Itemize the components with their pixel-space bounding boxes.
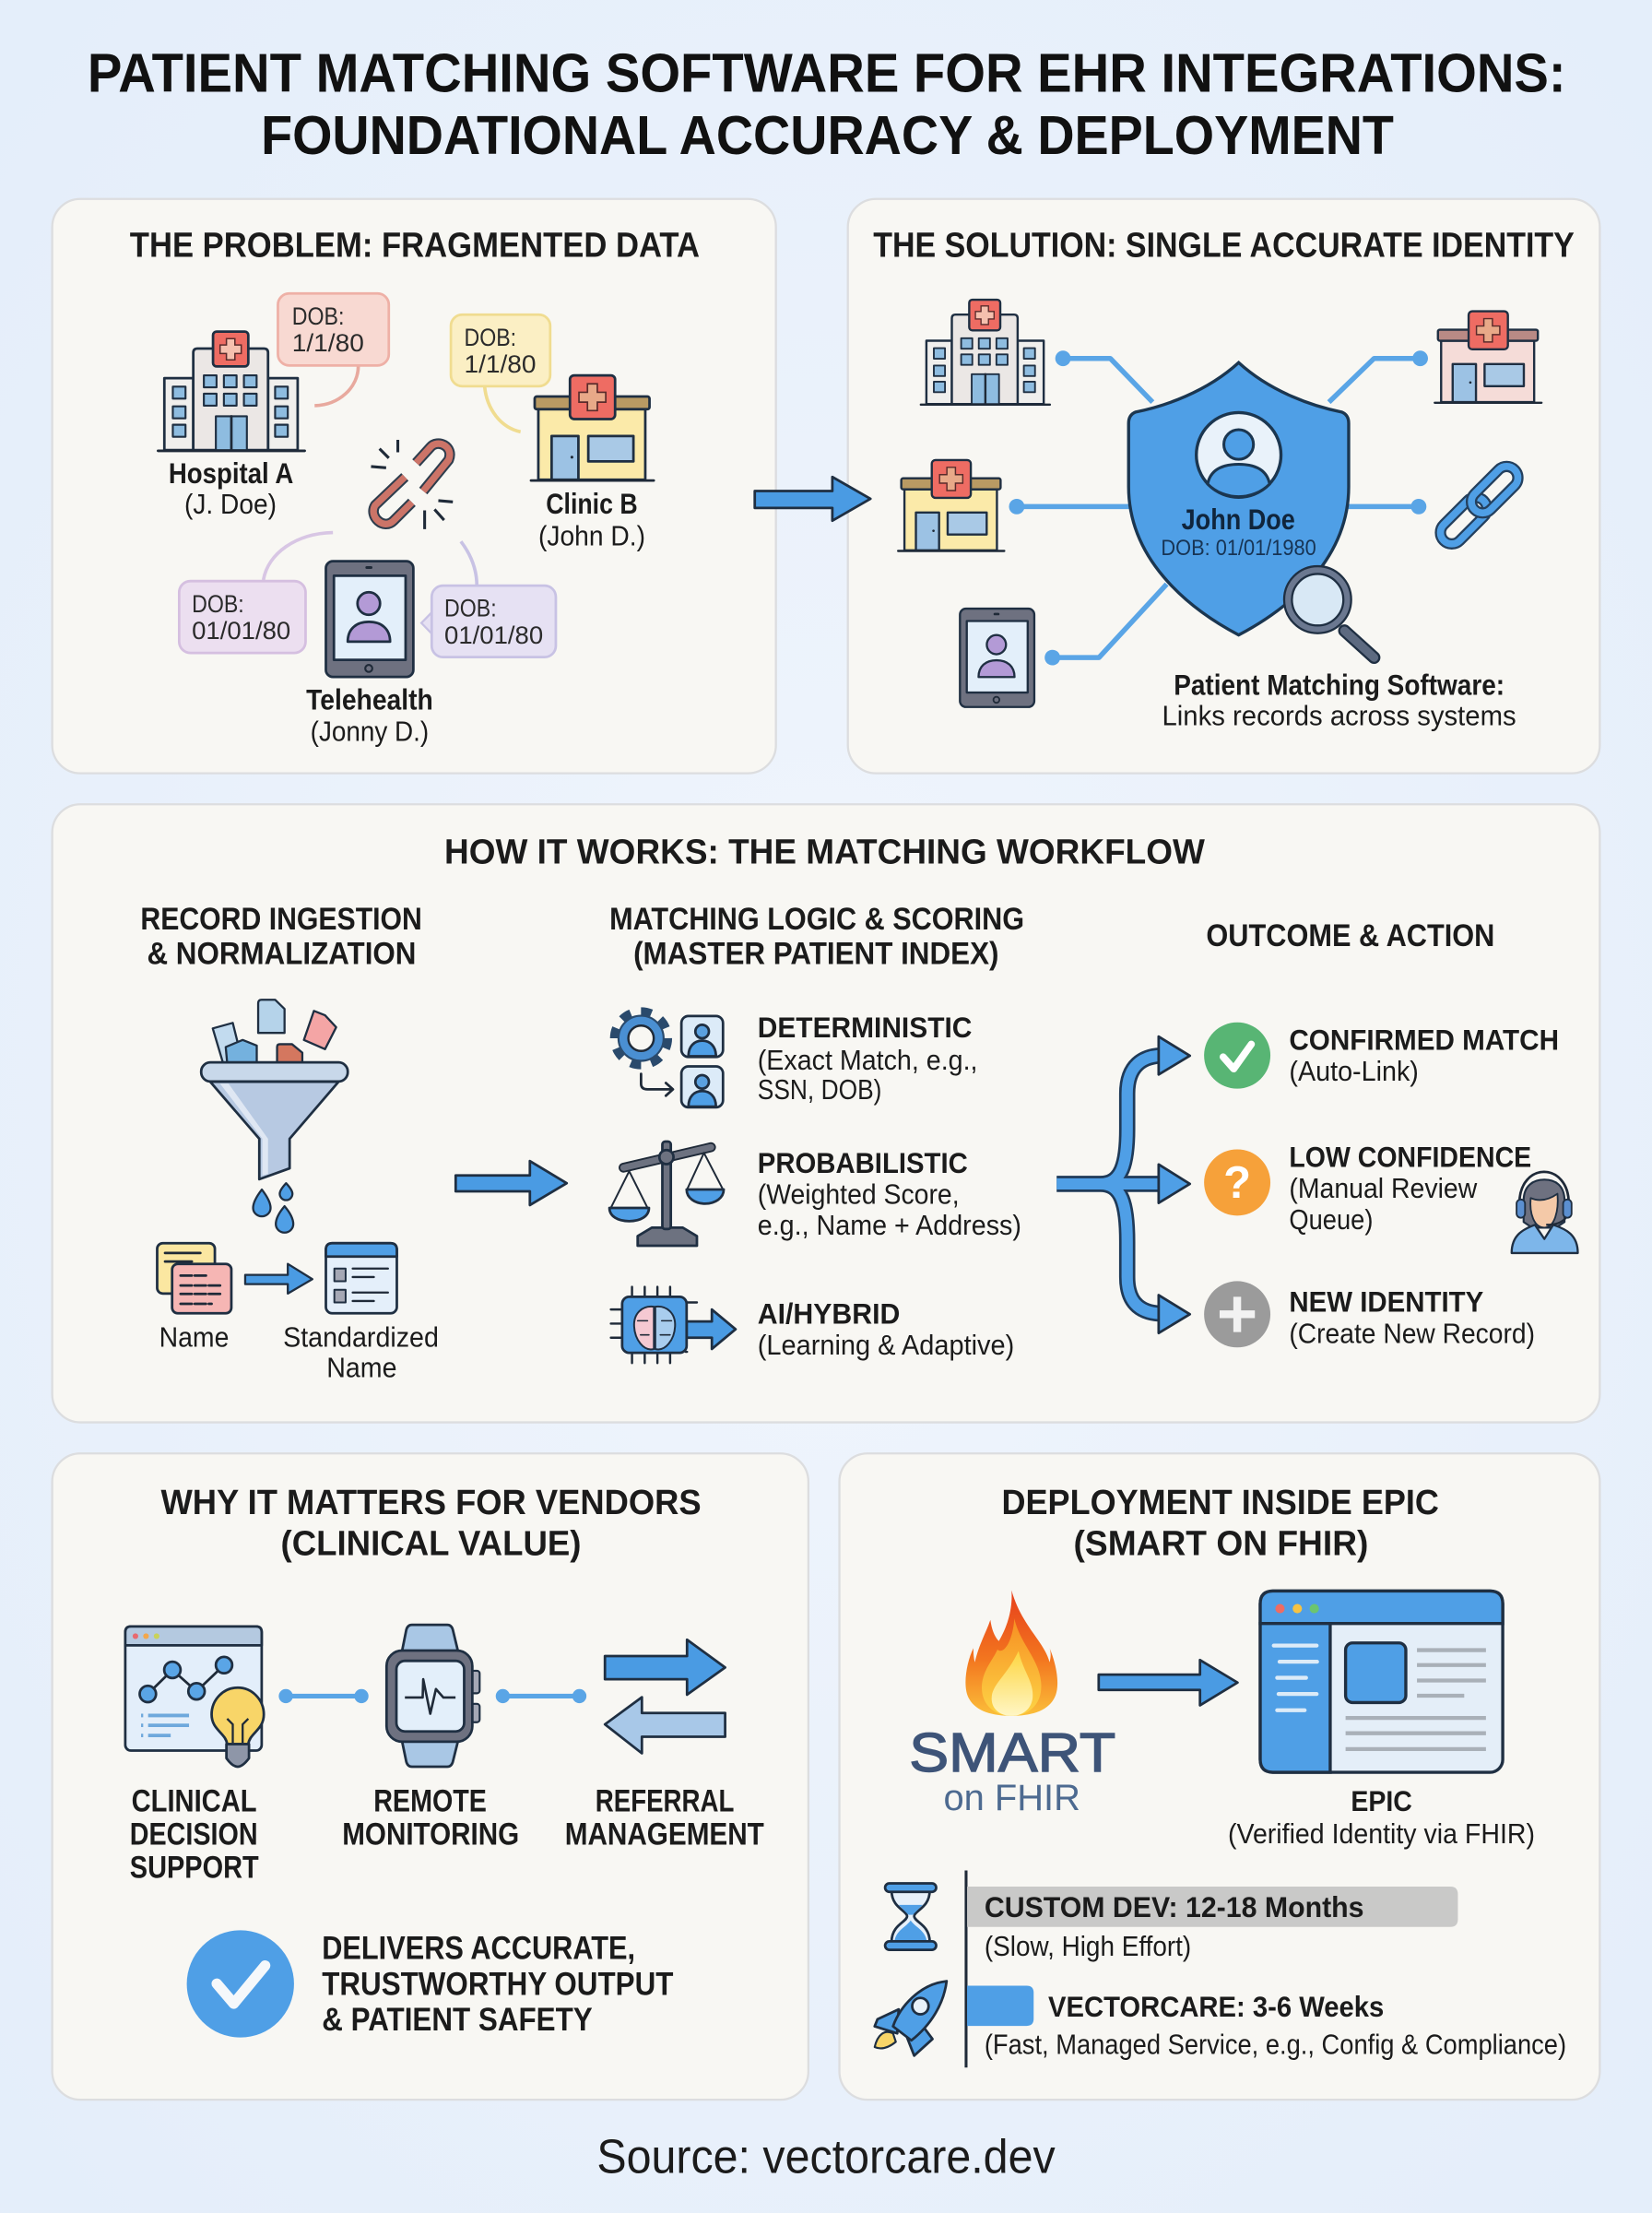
- icon: low confidence question mark: [1204, 1149, 1270, 1215]
- icon: hourglass: [885, 1884, 937, 1950]
- link dots: support to monitoring: [278, 1689, 369, 1703]
- heading: deployment: [1002, 1483, 1439, 1563]
- arrow: branching outcomes: [1056, 1036, 1190, 1333]
- bar: custom dev timeline: [967, 1887, 1457, 1962]
- heading: why it matters: (CLINICAL VALUE): [281, 1523, 581, 1563]
- icon: new identity plus: [1204, 1281, 1270, 1347]
- label: referral management: MANAGEMENT: [565, 1817, 764, 1852]
- heading: deployment: DEPLOYMENT INSIDE EPIC: [1002, 1483, 1439, 1522]
- note: fast managed service: (Fast, Managed Service, e.g., Config & Compliance): [985, 2029, 1566, 2060]
- heading: why it matters: [160, 1483, 702, 1563]
- icon: standardized record window: [326, 1243, 396, 1313]
- panel: why it matters: [53, 1453, 808, 2100]
- label: remote monitoring: MONITORING: [342, 1817, 519, 1852]
- label: referral management: [565, 1784, 764, 1852]
- title: FOUNDATIONAL ACCURACY & DEPLOYMENT: [261, 104, 1394, 166]
- title: [88, 41, 1566, 166]
- text: new identity: [1289, 1285, 1535, 1349]
- text: confirmed match: CONFIRMED MATCH: [1289, 1024, 1559, 1057]
- callout: hospital DOB: 1/1/80: [292, 329, 364, 357]
- text: delivers accurate output: TRUSTWORTHY OUTPUT: [322, 1967, 674, 2003]
- label: hospital A: [169, 457, 293, 520]
- arrow: problem to solution: [755, 477, 870, 521]
- text: probabilistic: [758, 1147, 1021, 1241]
- text: AI hybrid: AI/HYBRID: [758, 1297, 900, 1330]
- title: PATIENT MATCHING SOFTWARE FOR EHR INTEGRATIONS:: [88, 41, 1566, 103]
- text: AI hybrid: [758, 1297, 1014, 1361]
- label: clinical decision support: SUPPORT: [130, 1850, 259, 1885]
- icon: hospital: [921, 300, 1050, 405]
- text: deterministic: (Exact Match, e.g.,: [758, 1045, 978, 1076]
- icon: broken chain link: [371, 440, 453, 529]
- text: probabilistic: e.g., Name + Address): [758, 1210, 1021, 1241]
- caption: patient matching software: [1162, 669, 1516, 732]
- icon: low confidence question mark: ?: [1223, 1158, 1251, 1208]
- column heading: record ingestion: & NORMALIZATION: [147, 937, 416, 972]
- text: deterministic: DETERMINISTIC: [758, 1012, 972, 1044]
- column heading: matching logic: (MASTER PATIENT INDEX): [633, 937, 998, 972]
- callout: telehealth DOB left: [179, 533, 333, 653]
- label: telehealth: Telehealth: [306, 684, 433, 716]
- callout: clinic DOB: 1/1/80: [464, 350, 537, 378]
- label: remote monitoring: REMOTE: [373, 1784, 487, 1819]
- icon: clinic yellow: [898, 460, 1004, 551]
- panel: how it works: [53, 804, 1599, 1423]
- icon: rocket: [875, 1982, 947, 2055]
- text: confirmed match: [1289, 1024, 1559, 1087]
- label: Epic: EPIC: [1351, 1785, 1412, 1817]
- callout: hospital DOB: [277, 293, 389, 406]
- text: deterministic: [758, 1012, 978, 1106]
- label: clinical decision support: [130, 1784, 259, 1885]
- arrow: raw to standardized: [245, 1264, 313, 1294]
- icon: decision support window with bulb: [125, 1627, 264, 1767]
- text: probabilistic: (Weighted Score,: [758, 1178, 960, 1210]
- label: telehealth: (Jonny D.): [311, 716, 429, 747]
- label: Epic: (Verified Identity via FHIR): [1228, 1818, 1535, 1850]
- icon: identity shield: [1128, 362, 1349, 635]
- logo: SMART on FHIR: SMART: [909, 1722, 1115, 1783]
- label: standardized name: Name: [326, 1353, 396, 1384]
- logo: SMART on FHIR: [909, 1722, 1115, 1818]
- panel: deployment inside Epic: [840, 1453, 1599, 2100]
- icon: clinic B: [531, 375, 654, 480]
- bar: custom dev timeline: CUSTOM DEV: 12-18 Months: [985, 1891, 1364, 1923]
- icon: balance scale: [609, 1142, 724, 1246]
- label: clinic B: [538, 488, 645, 551]
- timeline axis: [965, 1870, 967, 2067]
- label: clinic B: Clinic B: [546, 488, 638, 520]
- heading: the solution: THE SOLUTION: SINGLE ACCURATE IDENTITY: [873, 226, 1575, 266]
- icon: confirmed check: [1204, 1023, 1270, 1089]
- callout: telehealth DOB left: DOB:: [192, 590, 244, 618]
- logo: SMART on FHIR: on FHIR: [943, 1778, 1080, 1818]
- text: probabilistic: PROBABILISTIC: [758, 1147, 968, 1179]
- icon: funnel with documents: [201, 1000, 348, 1233]
- icon: smart watch: [386, 1625, 479, 1767]
- icon: tablet: [960, 609, 1034, 707]
- column heading: matching logic: MATCHING LOGIC & SCORING: [609, 902, 1024, 937]
- icon: Epic application window: [1260, 1591, 1503, 1772]
- icon: raw name records: [157, 1243, 231, 1313]
- label: referral management: REFERRAL: [596, 1784, 734, 1819]
- icon: identity shield: John Doe: [1182, 503, 1295, 536]
- text: new identity: (Create New Record): [1289, 1318, 1535, 1349]
- bar: VectorCare timeline: [967, 1985, 1566, 2060]
- label: Epic: [1228, 1785, 1535, 1850]
- label: clinical decision support: CLINICAL: [132, 1784, 257, 1819]
- icon: magnifying glass: [1288, 570, 1375, 657]
- source footer: Source: vectorcare.dev: [596, 2131, 1056, 2184]
- caption: patient matching software: Links records across systems: [1162, 701, 1516, 732]
- text: delivers accurate output: [322, 1931, 674, 2038]
- icon: telehealth tablet: [326, 562, 413, 677]
- icon: support agent: [1512, 1172, 1578, 1253]
- text: confirmed match: (Auto-Link): [1289, 1056, 1419, 1087]
- link dots: monitoring to referral: [496, 1689, 586, 1703]
- column heading: record ingestion: RECORD INGESTION: [140, 902, 422, 937]
- callout: telehealth DOB right: [421, 541, 556, 657]
- text: low confidence: Queue): [1289, 1204, 1373, 1236]
- heading: how it works: HOW IT WORKS: THE MATCHING WORKFLOW: [444, 833, 1206, 872]
- heading: the problem: THE PROBLEM: FRAGMENTED DATA: [130, 226, 700, 266]
- label: hospital A: Hospital A: [169, 457, 293, 490]
- icon: AI chip with brain: [611, 1287, 736, 1363]
- icon: blue check circle: [187, 1930, 294, 2038]
- label: clinic B: (John D.): [538, 520, 645, 551]
- callout: clinic DOB: [451, 314, 550, 432]
- icon: hospital A: [158, 332, 305, 451]
- label: hospital A: (J. Doe): [184, 489, 277, 520]
- column heading: record ingestion: [140, 902, 422, 972]
- callout: telehealth DOB left: 01/01/80: [192, 617, 290, 645]
- icon: FHIR flame: [965, 1591, 1057, 1716]
- heading: deployment: (SMART ON FHIR): [1074, 1523, 1368, 1563]
- icon: chain link: [1435, 462, 1523, 549]
- callout: hospital DOB: DOB:: [292, 302, 344, 330]
- icon: gear and patient cards: [615, 1012, 723, 1107]
- connectors to shield: [1009, 350, 1428, 666]
- callout: clinic DOB: DOB:: [464, 324, 516, 351]
- callout: telehealth DOB right: DOB:: [444, 595, 497, 622]
- text: deterministic: SSN, DOB): [758, 1074, 881, 1106]
- label: name: Name: [159, 1322, 229, 1354]
- text: delivers accurate output: & PATIENT SAFETY: [322, 2002, 593, 2038]
- heading: why it matters: WHY IT MATTERS FOR VENDORS: [160, 1483, 702, 1522]
- column heading: matching logic: [609, 902, 1024, 972]
- arrow: SMART to Epic: [1099, 1660, 1237, 1705]
- caption: patient matching software: Patient Matching Software:: [1174, 669, 1504, 702]
- arrow: ingestion to matching: [455, 1161, 567, 1205]
- icon: identity shield: DOB: 01/01/1980: [1161, 537, 1316, 561]
- icon: clinic pink: [1434, 312, 1541, 403]
- text: new identity: NEW IDENTITY: [1289, 1285, 1483, 1318]
- label: clinical decision support: DECISION: [130, 1817, 258, 1852]
- text: low confidence: [1289, 1141, 1531, 1236]
- label: standardized name: Standardized: [283, 1322, 439, 1354]
- note: slow high effort: (Slow, High Effort): [985, 1931, 1191, 1962]
- label: remote monitoring: [342, 1784, 519, 1852]
- label: standardized name: [283, 1322, 439, 1384]
- panel: the problem: [53, 199, 776, 774]
- panel: the solution: [848, 199, 1599, 774]
- text: low confidence: LOW CONFIDENCE: [1289, 1141, 1531, 1173]
- text: AI hybrid: (Learning & Adaptive): [758, 1330, 1014, 1361]
- icon: referral arrows: [605, 1639, 726, 1753]
- bar: VectorCare timeline: VECTORCARE: 3-6 Weeks: [1048, 1991, 1384, 2023]
- callout: telehealth DOB right: 01/01/80: [444, 621, 543, 649]
- column heading: outcome: OUTCOME & ACTION: [1206, 918, 1494, 953]
- label: telehealth: [306, 684, 433, 747]
- text: low confidence: (Manual Review: [1289, 1173, 1478, 1204]
- text: delivers accurate output: DELIVERS ACCURATE,: [322, 1931, 635, 1967]
